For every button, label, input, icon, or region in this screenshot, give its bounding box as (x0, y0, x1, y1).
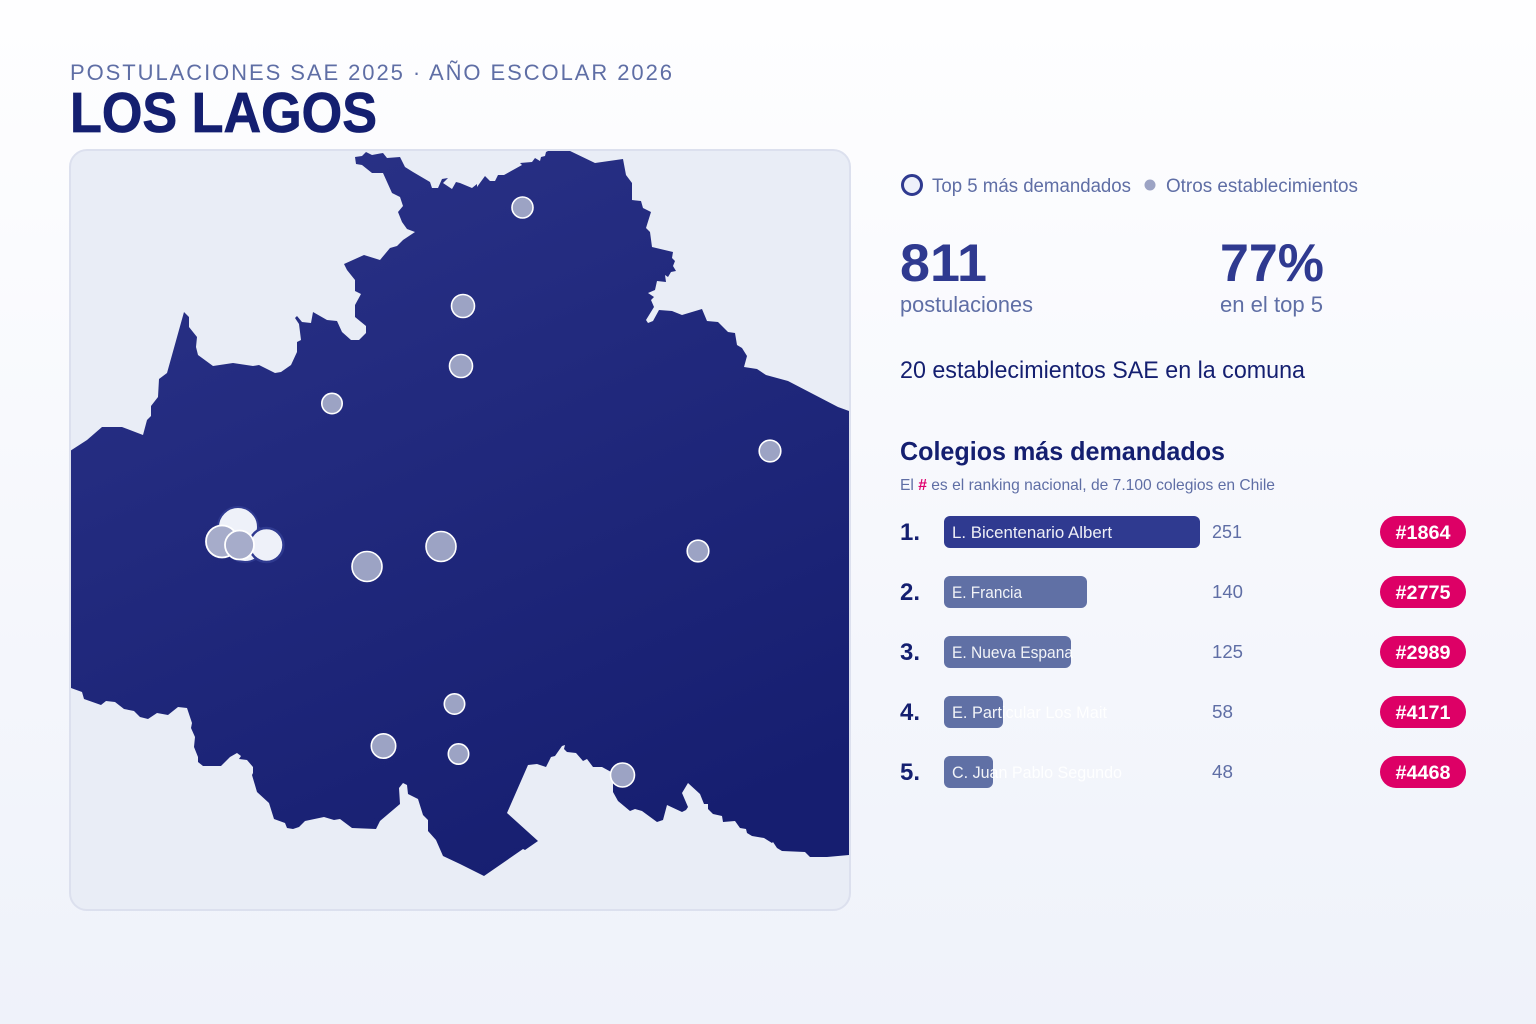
row 5: #4468 (1396, 763, 1450, 784)
row 2 (900, 576, 1466, 608)
stat: top 5 share: en el top 5 (1220, 292, 1323, 317)
legend: top 5 ring (902, 176, 922, 194)
stat: applications: 811 (900, 234, 987, 293)
row 4: 4. (900, 699, 920, 726)
stat: top 5 share: 77% (1220, 234, 1324, 293)
row 3: 3. (900, 639, 920, 666)
row 2: 140 (1212, 581, 1243, 602)
panel: legend (902, 176, 1358, 197)
map: region shape (60, 150, 860, 876)
legend: top 5 label: Top 5 más demandados (932, 176, 1131, 197)
row 2: E. Francia (952, 583, 1022, 602)
row 1: #1864 (1396, 523, 1451, 544)
title: LOS LAGOS (70, 81, 377, 145)
legend: other dot (1144, 180, 1156, 190)
stat: applications (900, 234, 1033, 317)
row 5 (900, 756, 1466, 788)
heading: most demanded schools: Colegios más demandados (900, 436, 1225, 466)
text: establishments count: 20 establecimientos SAE en la comuna (900, 357, 1306, 384)
row 1: 251 (1212, 521, 1242, 542)
text: ranking note: El # es el ranking nacional, de 7.100 colegios en Chile (900, 477, 1275, 494)
panel: map (60, 150, 860, 910)
row 5: 5. (900, 759, 920, 786)
chart: school ranking (900, 516, 1466, 788)
row 1 (900, 516, 1466, 548)
legend: other label: Otros establecimientos (1166, 176, 1358, 197)
row 5: C. Juan Pablo Segundo (952, 763, 1122, 782)
row 1: L. Bicentenario Albert (952, 523, 1112, 542)
row 4: E. Particular Los Mait (952, 703, 1107, 722)
row 4: 58 (1212, 701, 1233, 722)
row 3: 125 (1212, 641, 1243, 662)
stat: applications: postulaciones (900, 292, 1033, 317)
row 2: #2775 (1396, 583, 1451, 604)
row 4 (900, 696, 1466, 728)
row 4: #4171 (1396, 703, 1451, 724)
row 3: E. Nueva Espana (952, 643, 1073, 662)
eyebrow subtitle: POSTULACIONES SAE 2025 · AÑO ESCOLAR 2026 (70, 60, 672, 85)
row 5: 48 (1212, 761, 1233, 782)
row 3 (900, 636, 1466, 668)
row 2: 2. (900, 579, 920, 606)
map: top 5 marker cluster (206, 507, 284, 562)
row 3: #2989 (1396, 643, 1450, 664)
map: other school markers (322, 197, 781, 787)
row 1: 1. (900, 519, 920, 546)
header (70, 60, 672, 145)
